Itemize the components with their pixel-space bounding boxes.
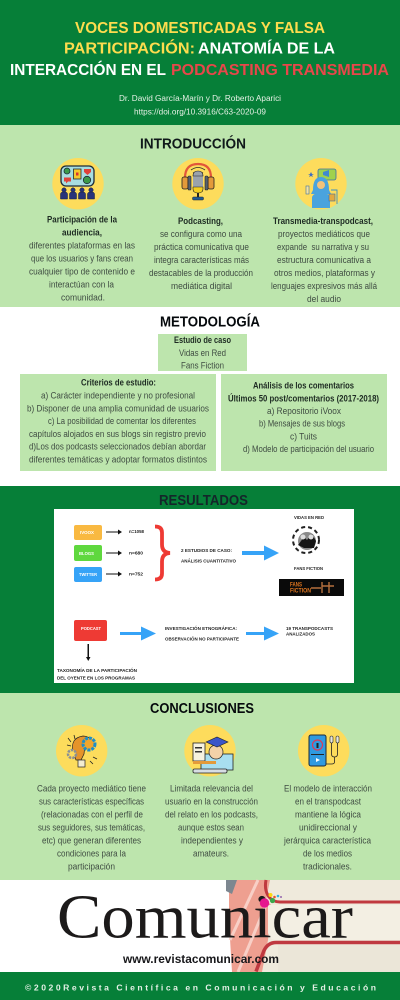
label: 2 estudios de caso (181, 548, 236, 564)
image: books (226, 880, 400, 972)
box: análisis de los comentarios (221, 374, 387, 471)
node: blogs: BLOGS (79, 551, 94, 556)
authors and doi (119, 93, 281, 116)
box: estudio de caso: Fans Fiction (181, 360, 224, 372)
text: conclusion 2: del relato en los podcasts, (165, 810, 258, 821)
panel: comunicar logo banner (0, 880, 400, 972)
text: conclusion 3: en el transpodcast (295, 797, 361, 808)
text: conclusion 2: usuario en la construcción (165, 797, 258, 808)
box: criterios de estudio: a) Carácter independiente y no profesional (41, 390, 195, 402)
text: conclusion 1: etc) que generan diferentes (42, 836, 141, 847)
node: ivoox (74, 525, 102, 540)
text: transmedia-transpodcast (271, 216, 378, 305)
box: análisis de los comentarios: b) Mensajes de sus blogs (259, 418, 345, 430)
heading: conclusiones: CONCLUSIONES (150, 701, 254, 717)
text: participación de la audiencia (29, 214, 135, 304)
label: 2 estudios de caso: 2 ESTUDIOS DE CASO: (181, 548, 232, 553)
box: estudio de caso: Vidas en Red (179, 348, 226, 359)
icon: audience screen (52, 158, 104, 209)
title: PARTICIPACIÓN: (64, 38, 195, 58)
icon: phone with earphones (298, 725, 349, 776)
node: podcast (74, 620, 107, 641)
title (10, 20, 389, 79)
label: taxonomía: TAXONOMÍA DE LA PARTICIPACIÓN (57, 666, 138, 673)
text: transmedia-transpodcast: Transmedia-transpodcast, (273, 216, 373, 227)
box: estudio de caso: Estudio de caso (174, 335, 231, 346)
text: transmedia-transpodcast: proyectos mediáticos que (278, 229, 370, 240)
text: conclusion 1: Cada proyecto mediático tiene (37, 784, 146, 795)
text: conclusion 2: aunque estos sean (178, 823, 244, 834)
text: conclusion 3: unidireccional y (299, 823, 357, 834)
label: investigación etnográfica (165, 624, 239, 642)
text: podcasting (149, 216, 253, 292)
arrow: to case studies (242, 546, 279, 560)
text: conclusion 1: (relacionadas con el perfil de (41, 810, 143, 821)
image: fans fiction banner: FANS (290, 582, 302, 588)
icon: graduate with laptop (184, 725, 236, 776)
labels: counts: n=752 (129, 572, 143, 576)
node: twitter: TWITTER (79, 572, 98, 577)
text: conclusion 1: sus seguidores, sus temáticas, (38, 823, 145, 834)
title: INTERACCIÓN EN EL (10, 60, 166, 79)
labels: counts: n=1058 (129, 529, 144, 534)
label: taxonomía (57, 666, 138, 680)
label: vidas en red: VIDAS EN RED (294, 515, 325, 520)
label: 19 transpodcasts (286, 626, 333, 637)
box: criterios de estudio: Criterios de estudio: (81, 378, 156, 388)
text: conclusion 2: Limitada relevancia del (170, 784, 253, 795)
label: investigación etnográfica: INVESTIGACIÓN ETNOGRÁFICA: (165, 624, 237, 631)
title: ANATOMÍA DE LA (198, 38, 335, 58)
panel: conclusiones (0, 693, 400, 880)
text: participación de la audiencia: que los usuarios y fans crean (31, 254, 133, 264)
arrow: podcast down (86, 644, 90, 661)
arrows: sources to counts (106, 530, 122, 576)
text: conclusion 3: jerárquica característica (283, 836, 372, 847)
panel: header (0, 0, 400, 125)
text: conclusion 2 (165, 784, 258, 860)
text: podcasting: integra características más (154, 255, 249, 266)
text: podcasting: destacables de la producción (149, 268, 253, 279)
text: participación de la audiencia: cualquier tipo de contenido e (29, 266, 135, 278)
text: transmedia-transpodcast: expande su narrativa y su (277, 242, 369, 253)
text: participación de la audiencia: Participación de la (47, 214, 118, 226)
title: PODCASTING TRANSMEDIA (171, 62, 389, 79)
node: podcast: PODCAST (81, 626, 101, 631)
icon: light bulb and gears (56, 725, 107, 776)
text: conclusion 3: mantiene la lógica (295, 810, 362, 821)
text: conclusion 3: de los medios (303, 849, 352, 860)
icon: transmedia creator (295, 158, 347, 209)
node: twitter (74, 567, 102, 582)
text: participación de la audiencia: audiencia, (62, 228, 102, 238)
box: criterios de estudio (20, 374, 216, 471)
panel: footer (0, 972, 400, 1000)
text: copyright: ©2020Revista Científica en Comunicación y Educación (25, 982, 376, 992)
image: fans fiction banner: FICTION (290, 588, 311, 594)
text: conclusion 3: tradicionales. (303, 862, 352, 873)
text: podcasting: práctica comunicativa que (154, 242, 249, 253)
text: transmedia-transpodcast: lenguajes expresivos más allá (271, 281, 378, 292)
text: conclusion 1 (37, 784, 146, 873)
box: análisis de los comentarios: Análisis de los comentarios (253, 380, 354, 392)
heading: resultados: RESULTADOS (159, 493, 248, 509)
text: conclusion 1: condiciones para la (57, 849, 127, 860)
text: participación de la audiencia: comunidad. (61, 292, 105, 304)
labels: counts (129, 529, 144, 576)
labels: counts: n=680 (129, 550, 143, 556)
heading: metodología: METODOLOGÍA (160, 314, 260, 330)
text: participación de la audiencia: diferentes plataformas en las (29, 240, 135, 252)
arrow: to transpodcasts (246, 626, 279, 640)
box: criterios de estudio: b) Disponer de una amplia comunidad de usuarios (27, 404, 209, 414)
image: fans fiction banner (279, 579, 344, 596)
text: podcasting: mediática digital (171, 281, 232, 292)
text: conclusion 1: participación (68, 862, 115, 873)
label: investigación etnográfica: OBSERVACIÓN NO PARTICIPANTE (165, 635, 239, 642)
image: vidas en red logo (293, 527, 319, 553)
label: fans fiction: FANS FICTION (294, 566, 324, 571)
panel: introducción (0, 125, 400, 307)
text: conclusion 2: independientes y (181, 836, 243, 847)
title: VOCES DOMESTICADAS Y FALSA (75, 20, 325, 37)
panel: metodología (0, 307, 400, 486)
panel: resultados (0, 486, 400, 693)
authors and doi: Dr. David García-Marín y Dr. Roberto Aparici (119, 93, 281, 103)
text: participación de la audiencia: interactúan con la (49, 280, 115, 290)
text: transmedia-transpodcast: otros medios, plataformas y (274, 268, 375, 279)
arrow: to ethnographic research (120, 626, 156, 640)
text: conclusion 3: El modelo de interacción (284, 784, 372, 795)
logo: comunicar: Comunicar (57, 884, 353, 952)
text: conclusion 3 (283, 784, 372, 873)
heading: introducción: INTRODUCCIÓN (140, 134, 246, 152)
box: análisis de los comentarios: c) Tuits (290, 432, 317, 442)
icon: podcast microphone (172, 158, 224, 209)
box: criterios de estudio: d)Los dos podcasts seleccionados debían abordar (29, 442, 207, 452)
icon: red brace (155, 526, 170, 580)
label: 2 estudios de caso: ANÁLISIS CUANTITATIVO (181, 558, 236, 564)
box: criterios de estudio: capítulos alojados en sus blogs sin registro previo (29, 429, 206, 440)
text: conclusion 2: amateurs. (193, 849, 229, 860)
authors and doi: https://doi.org/10.3916/C63-2020-09 (134, 106, 266, 116)
label: taxonomía: DEL OYENTE EN LOS PROGRAMAS (57, 676, 135, 680)
box: criterios de estudio: diferentes temáticas y adoptar formatos distintos (29, 454, 207, 466)
label: 19 transpodcasts: ANALIZADOS (286, 632, 315, 637)
link: website: www.revistacomunicar.com (122, 954, 279, 966)
text: podcasting: Podcasting, (178, 216, 223, 227)
text: conclusion 1: sus características específicas (39, 797, 144, 808)
text: transmedia-transpodcast: estructura comunicativa a (277, 255, 372, 266)
text: podcasting: se configura como una (160, 229, 243, 240)
node: ivoox: IVOOX (80, 530, 95, 535)
label: 19 transpodcasts: 19 TRANSPODCASTS (286, 626, 333, 631)
node: blogs (74, 545, 102, 561)
box: criterios de estudio: c) La posibilidad de comentar los diferentes (48, 416, 196, 427)
chart: flow diagram (54, 509, 354, 683)
box: análisis de los comentarios: a) Repositorio iVoox (267, 406, 341, 417)
box: estudio de caso (158, 334, 247, 372)
text: transmedia-transpodcast: del audio (307, 294, 341, 305)
